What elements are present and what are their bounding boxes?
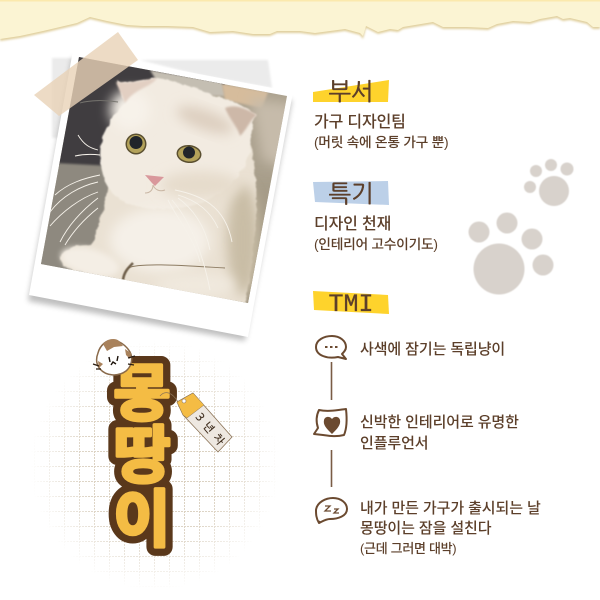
tag: 3년차: 3 년 차	[193, 411, 227, 448]
TMI text list: 내가 만든 가구가 출시되는 날	[360, 500, 541, 517]
section: 부서: (머릿 속에 온통 가구 뿐)	[314, 135, 448, 150]
TMI text list	[360, 341, 541, 556]
masking tape	[34, 32, 138, 116]
torn paper top edge	[0, 0, 600, 41]
small paw print	[524, 159, 574, 206]
TMI text list: 신박한 인테리어로 유명한	[360, 414, 519, 431]
cat whiskers	[50, 101, 232, 290]
TMI text list: (근데 그러면 대박)	[360, 541, 456, 556]
title: 몽땅이: 이	[113, 469, 171, 559]
icon: speech bubble with dots	[316, 336, 346, 359]
faded ghost print behind photo	[52, 58, 272, 138]
cat eyes and nose	[126, 134, 202, 193]
cat body	[60, 78, 257, 306]
fur shading	[58, 78, 259, 297]
section: 부서	[313, 80, 448, 150]
large paw print	[468, 212, 554, 294]
connector line	[330, 450, 332, 487]
section: 특기: 디자인 천재	[314, 215, 391, 233]
tag: 3년차	[160, 393, 232, 452]
section: 부서: 가구 디자인팀	[314, 113, 406, 131]
section heading: TMI: TMI	[328, 290, 374, 319]
cat head sticker	[93, 339, 135, 375]
polaroid photo	[28, 50, 300, 341]
section: 부서: 부서	[328, 80, 374, 104]
section heading: TMI	[313, 290, 389, 319]
section: 특기: 특기	[328, 182, 374, 206]
TMI text list: 인플루언서	[360, 435, 429, 452]
title: 몽땅이: 몽	[113, 343, 171, 433]
cat photo	[41, 57, 287, 303]
title: 몽땅이: 땅	[113, 405, 171, 495]
title: 몽땅이: 이	[113, 469, 171, 559]
icon: heart bubble	[314, 409, 347, 436]
section: 특기: (인테리어 고수이기도)	[314, 237, 438, 252]
TMI text list: 몽땅이는 잠을 설친다	[360, 520, 492, 537]
connector line	[330, 362, 332, 400]
title: 몽땅이	[113, 343, 171, 559]
grid paper background	[38, 348, 272, 582]
section: 특기	[313, 181, 438, 252]
title: 몽땅이: 땅	[113, 405, 171, 495]
TMI text list: 사색에 잠기는 독립냥이	[360, 341, 505, 358]
icon: sleeping bubble	[316, 498, 347, 523]
title: 몽땅이: 몽	[113, 343, 171, 433]
